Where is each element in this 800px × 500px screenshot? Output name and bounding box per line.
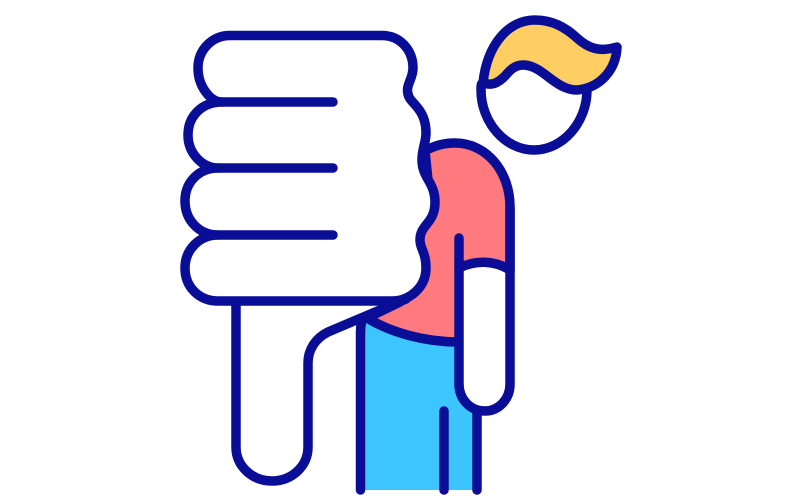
finger lines <box>218 102 333 235</box>
head <box>481 80 587 150</box>
pants <box>360 320 477 490</box>
arm outline and sleeve <box>459 207 510 411</box>
hand with thumb <box>185 36 435 481</box>
shirt <box>367 143 510 342</box>
hair <box>483 20 617 90</box>
arm <box>459 238 510 411</box>
